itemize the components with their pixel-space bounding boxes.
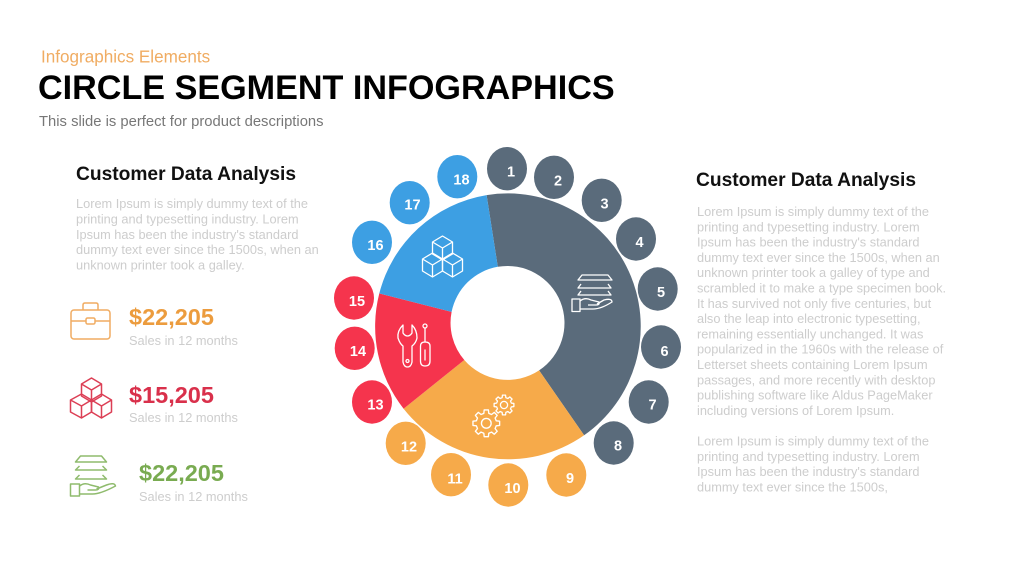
stat: cubes sales: [70, 378, 238, 425]
badge 12: 12: [401, 440, 417, 456]
badge 12: [386, 422, 426, 465]
badge 6: 6: [660, 344, 669, 360]
donut chart: [375, 193, 641, 459]
badge 6: [641, 325, 681, 369]
badge 15: 15: [349, 294, 365, 310]
badge 17: [390, 181, 430, 224]
left panel text: dummy text ever since the 1500s, when an: [76, 242, 319, 257]
right panel text: Ipsum has been the industry's standard: [697, 464, 919, 479]
left panel text: unknown printer took a galley.: [76, 258, 245, 273]
caption: Sales in 12 months: [129, 333, 238, 348]
badge 3: [582, 179, 622, 222]
stat: briefcase sales: [71, 303, 238, 348]
right panel text: Lorem Ipsum is simply dummy text of the: [697, 434, 929, 448]
badge 7: 7: [648, 398, 657, 414]
right panel heading: Customer Data Analysis: [696, 170, 916, 191]
right panel text: remaining essentially unchanged. It was: [697, 326, 923, 341]
caption: Sales in 12 months: [139, 489, 248, 504]
segment: blue: [379, 195, 498, 312]
eyebrow heading: Infographics Elements: [41, 48, 210, 66]
badge 13: [352, 380, 392, 424]
badge 14: 14: [350, 344, 366, 360]
badge 8: 8: [614, 438, 622, 454]
badge 13: 13: [367, 398, 384, 414]
icon: hand with stack: [572, 275, 612, 312]
amount: $22,205: [139, 460, 224, 486]
badge 7: [629, 380, 669, 424]
left panel text: printing and typesetting industry. Lorem: [76, 211, 299, 226]
right panel text: passages, and more recently with desktop: [697, 372, 935, 387]
amount: $15,205: [129, 382, 214, 408]
right panel text: popularized in the 1960s with the release of: [697, 342, 944, 357]
badge 9: 9: [566, 471, 574, 487]
segment: orange: [404, 360, 584, 459]
caption: Sales in 12 months: [129, 410, 238, 425]
badge 9: [546, 453, 586, 497]
badge 17: 17: [404, 198, 421, 214]
icon: cubes: [70, 378, 112, 418]
right panel text: dummy text ever since the 1500s, when an: [697, 250, 940, 265]
badge 8: [594, 421, 634, 465]
right panel text: It has survived not only five centuries, but: [697, 296, 932, 311]
right panel text: printing and typesetting industry. Lorem: [697, 449, 920, 464]
badge 11: [431, 453, 471, 496]
badge 11: 11: [447, 472, 463, 488]
icon: wrench and screwdriver: [398, 324, 430, 367]
badge 14: [335, 327, 375, 370]
icon: large gear: [473, 410, 500, 437]
badge 4: 4: [635, 235, 644, 251]
badge 16: 16: [367, 238, 384, 254]
badge 5: [638, 267, 678, 311]
numbered badges ring: [334, 147, 681, 507]
icon: hand with stack: [70, 456, 116, 496]
icon: briefcase: [71, 303, 110, 339]
badge 15: [334, 276, 374, 320]
badge 3: 3: [600, 196, 609, 212]
badge 18: 18: [453, 172, 470, 188]
badge 2: [534, 156, 574, 199]
right panel text: Letterset sheets containing Lorem Ipsum: [697, 357, 928, 372]
badge 1: 1: [507, 164, 515, 180]
left panel text: [76, 196, 319, 273]
right panel text: publishing software like Aldus PageMaker: [697, 388, 933, 403]
segment: slate: [487, 193, 641, 435]
right panel text: including versions of Lorem Ipsum.: [697, 403, 894, 418]
right panel text: [697, 204, 946, 494]
left panel text: Lorem Ipsum is simply dummy text of the: [76, 196, 308, 211]
icon: small gear: [494, 395, 514, 415]
badge 18: [437, 155, 477, 198]
title: CIRCLE SEGMENT INFOGRAPHICS: [38, 69, 615, 107]
badge 4: [616, 217, 656, 261]
right panel text: printing and typesetting industry. Lorem: [697, 219, 920, 234]
amount: $22,205: [129, 304, 214, 330]
left panel text: Ipsum has been the industry's standard: [76, 227, 298, 242]
right panel text: also the leap into electronic typesetting,: [697, 311, 921, 326]
stat: hand sales: [70, 456, 248, 504]
badge 1: [487, 147, 527, 190]
left panel heading: Customer Data Analysis: [76, 164, 296, 185]
right panel text: Ipsum has been the industry's standard: [697, 235, 919, 250]
segment: red: [375, 293, 464, 409]
right panel text: Lorem Ipsum is simply dummy text of the: [697, 204, 929, 219]
right panel text: scrambled it to make a type specimen book.: [697, 280, 946, 296]
badge 2: 2: [554, 174, 562, 190]
badge 10: [488, 463, 528, 507]
badge 10: 10: [504, 481, 521, 497]
right panel text: unknown printer took a galley of type and: [697, 265, 930, 280]
icon: cubes: [422, 236, 462, 277]
badge 5: 5: [657, 285, 665, 301]
right panel text: dummy text ever since the 1500s,: [697, 479, 888, 494]
subtitle: This slide is perfect for product descriptions: [39, 114, 324, 130]
badge 16: [352, 221, 392, 264]
